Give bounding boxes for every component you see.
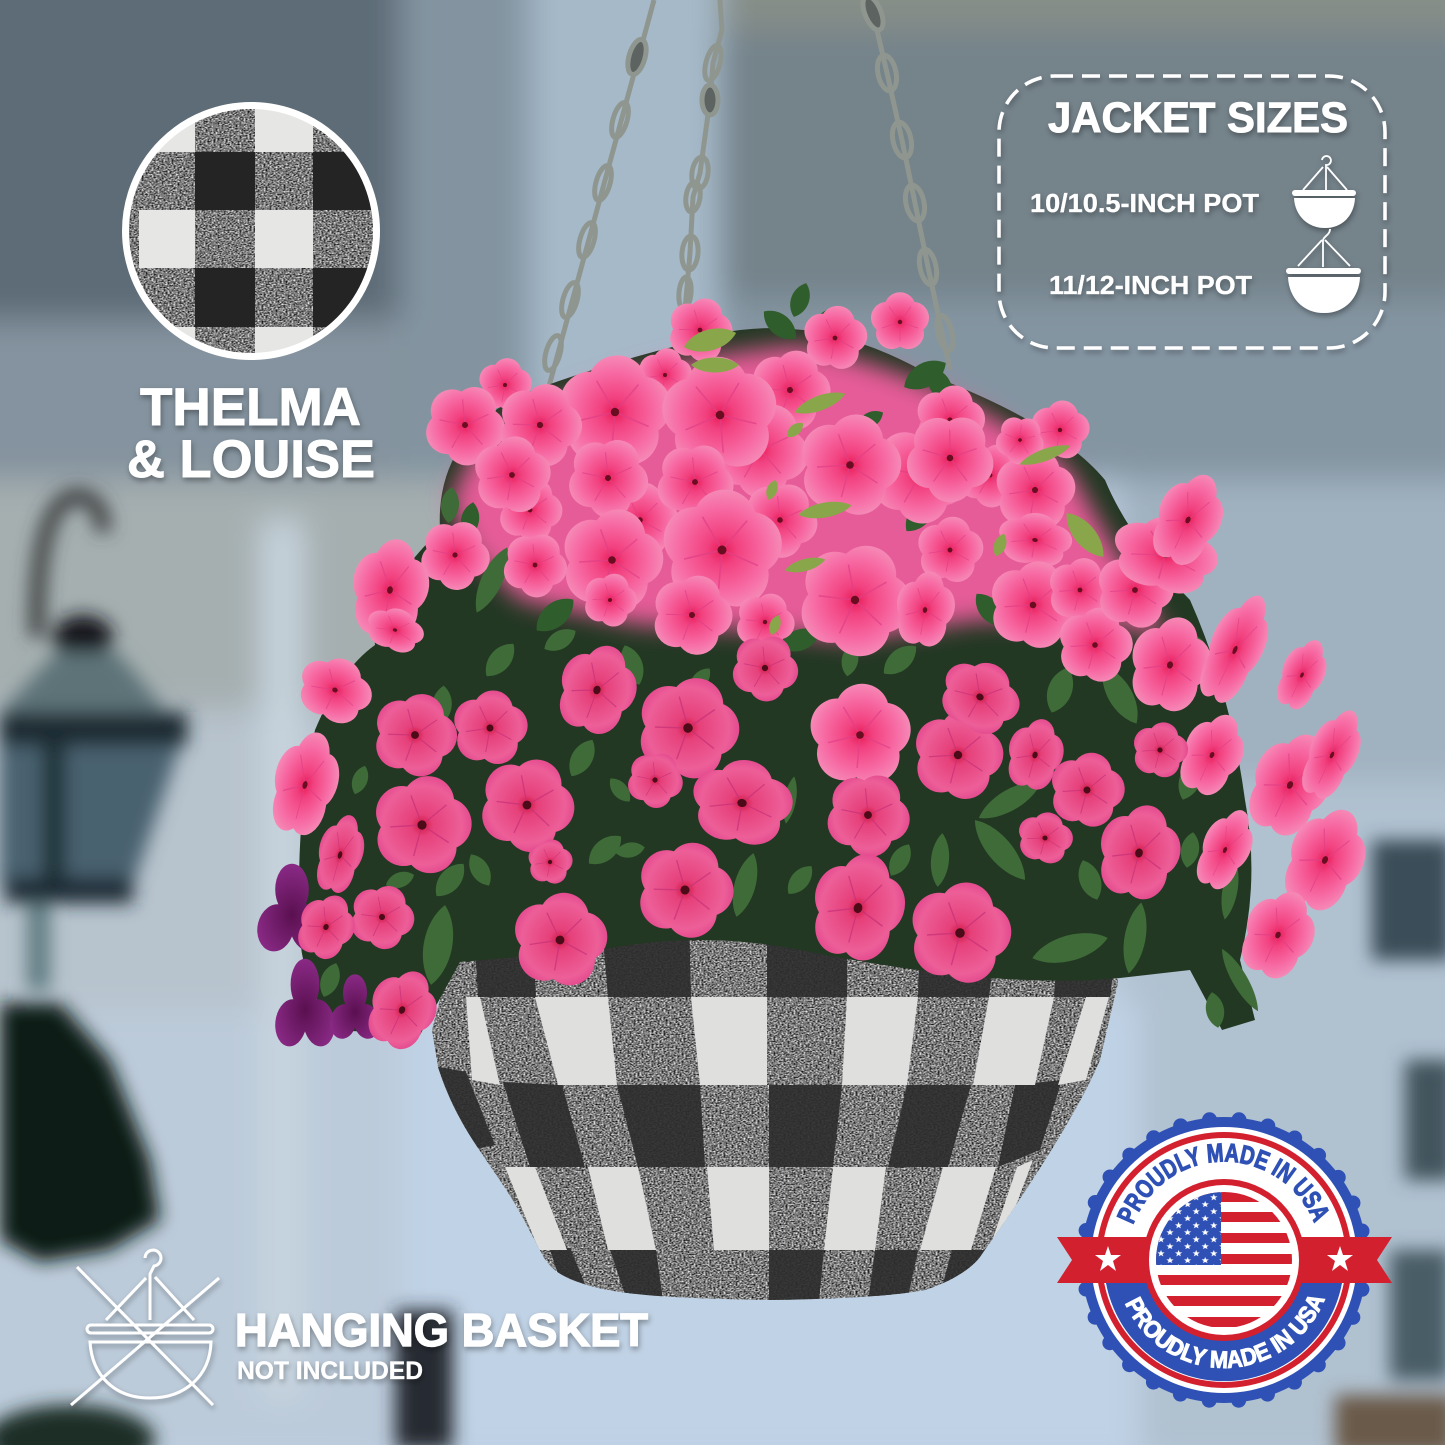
label: HANGING BASKET — [235, 1304, 648, 1356]
plaid fabric pot jacket — [432, 940, 1118, 1300]
icon: small pot — [1292, 156, 1356, 228]
flag — [1143, 1179, 1305, 1341]
bottom arc text: PROUDLY MADE IN USA — [1124, 1296, 1326, 1369]
purple trailing blooms — [251, 864, 384, 1055]
badge: proudly made in USA — [1057, 1112, 1392, 1408]
hanging chains — [541, 0, 956, 390]
icon: large pot — [1286, 229, 1361, 313]
icon: crossed out basket — [71, 1250, 219, 1405]
fabric swatch — [125, 100, 377, 359]
swatch name — [127, 378, 375, 489]
size label small: 10/10.5-INCH POT — [1030, 188, 1259, 218]
panel: jacket sizes — [999, 76, 1385, 348]
upper pale pink blooms — [255, 287, 1386, 998]
ribbon — [1057, 1237, 1392, 1283]
soft pink upper dome underlayer — [450, 345, 1170, 640]
top arc text: PROUDLY MADE IN USA — [1116, 1142, 1329, 1224]
swatch name: THELMA — [140, 378, 361, 437]
callout: hanging basket not included — [71, 1250, 648, 1405]
lower deep pink blooms — [282, 620, 1197, 1067]
sublabel: NOT INCLUDED — [237, 1357, 423, 1385]
swatch name: & LOUISE — [127, 430, 375, 489]
foliage mass — [299, 328, 1255, 1035]
size label large: 11/12-INCH POT — [1049, 270, 1252, 300]
flower arrangement — [251, 280, 1386, 1067]
mid green leaves — [315, 486, 1264, 1029]
heading: JACKET SIZES — [1048, 94, 1348, 142]
lime leaf accents — [681, 323, 1111, 637]
crown leaves — [458, 280, 1035, 657]
